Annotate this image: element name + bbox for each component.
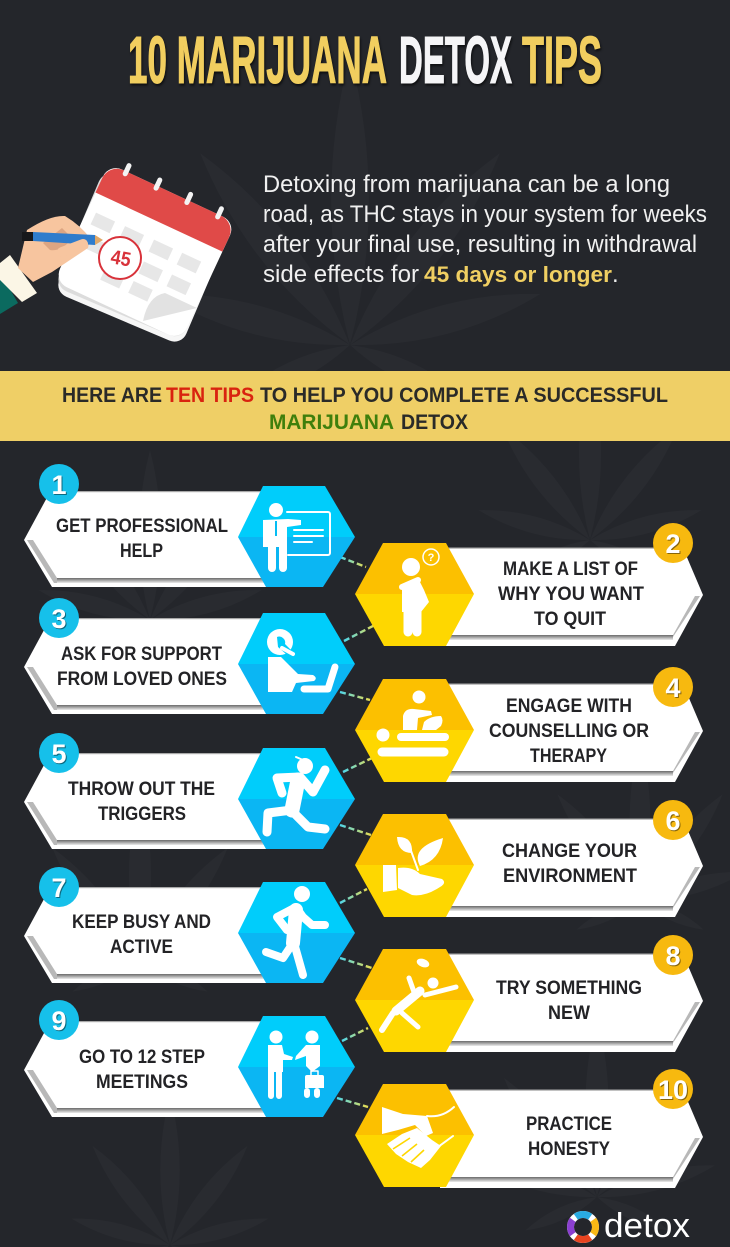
45 circled: 45 [109,246,133,272]
tip 9: go to 12 step meetings: MEETINGS [96,1071,188,1093]
icon: thinking person [402,549,439,632]
tip 3: ask for support: ASK FOR SUPPORT [61,643,222,665]
tip 10: practice honesty: 10 [658,1075,688,1105]
tip 2: make a list: 2 [665,529,681,559]
intro text: Detoxing from marijuana can be a long [263,171,670,198]
tip 6: change your environment: 6 [665,806,681,836]
hand [18,216,90,282]
icon: two people shaking hands [268,1030,324,1096]
banner: here are ten tips [0,371,730,441]
icon: calendar with hand [0,155,240,346]
intro text: side effects for [263,261,419,288]
banner: here are ten tips: HERE ARE [62,384,162,407]
tip 8: try something new: 8 [665,941,681,971]
icon: handshake [382,1107,454,1168]
tip 7: keep busy and active: ACTIVE [110,936,173,958]
45 circled [99,237,141,279]
banner: here are ten tips: DETOX [401,411,468,434]
tip 2: make a list [355,523,703,646]
pencil [33,232,95,245]
intro text: after your final use, resulting in withdrawal [263,231,697,258]
tip 1: get professional help: HELP [120,540,163,562]
icon: plant in hand [383,837,444,895]
icon: jogger [266,886,325,975]
icon: runner with cap [267,757,325,832]
tip 8: try something new [355,935,703,1052]
cuff [0,255,37,302]
tip 4: counselling or therapy [355,667,703,782]
banner: here are ten tips: TEN TIPS [166,384,254,407]
tip 7: keep busy and active [24,867,355,983]
tip 3: ask for support: 3 [51,604,67,634]
tip 7: keep busy and active: 7 [51,873,67,903]
icon: presenter with board [263,503,330,568]
tip 7: keep busy and active: KEEP BUSY AND [72,911,211,933]
tip 8: try something new: NEW [548,1002,591,1024]
logo: detox: detox [604,1207,690,1245]
title: 10 MARIJUANA [128,23,387,98]
tip 1: get professional help [24,464,355,587]
tip 10: practice honesty [355,1069,703,1188]
sleeve [0,272,18,314]
tip 9: go to 12 step meetings: GO TO 12 STEP [79,1046,205,1068]
tip 5: throw out the triggers [24,733,355,849]
tip 3: ask for support: FROM LOVED ONES [57,668,227,690]
tip 4: counselling or therapy: ENGAGE WITH [506,695,632,717]
tip 5: throw out the triggers: THROW OUT THE [68,778,215,800]
icon: person at laptop [267,629,335,692]
icon: person catching ball [382,957,456,1030]
tip 9: go to 12 step meetings [24,1000,355,1117]
intro text: road, as THC stays in your system for weeks [263,201,707,228]
tip 5: throw out the triggers: 5 [51,739,67,769]
tip 2: make a list: WHY YOU WANT [498,583,644,605]
tip 9: go to 12 step meetings: 9 [51,1006,67,1036]
tip 10: practice honesty: HONESTY [528,1138,610,1160]
tip 10: practice honesty: PRACTICE [526,1113,612,1135]
tip 1: get professional help: GET PROFESSIONAL [56,515,228,537]
tip 6: change your environment [355,800,703,917]
page curl [143,293,197,321]
banner: here are ten tips: MARIJUANA [269,411,394,434]
tip 5: throw out the triggers: TRIGGERS [98,803,186,825]
tip 2: make a list: TO QUIT [534,608,606,630]
tip 6: change your environment: ENVIRONMENT [503,865,637,887]
tip 3: ask for support [24,598,355,714]
tip 4: counselling or therapy: THERAPY [530,745,607,767]
intro text: 45 days or longer [424,262,612,287]
connector lines [337,557,375,1107]
logo: detox [570,1207,690,1245]
tip 6: change your environment: CHANGE YOUR [502,840,637,862]
tip 8: try something new: TRY SOMETHING [496,977,642,999]
intro text [263,171,707,288]
intro text: . [612,261,619,288]
title: TIPS [522,23,602,98]
banner: here are ten tips: TO HELP YOU COMPLETE A SUCCESSFUL [260,384,668,407]
icon: massage therapy [376,690,445,752]
title: DETOX [399,23,512,98]
icon: thinking person: ? [428,552,435,564]
tip 4: counselling or therapy: COUNSELLING OR [489,720,649,742]
calendar sheet [54,155,240,340]
tip 1: get professional help: 1 [51,470,67,500]
tip 2: make a list: MAKE A LIST OF [503,558,638,580]
calendar page stack [52,169,233,346]
tip 4: counselling or therapy: 4 [665,673,681,703]
